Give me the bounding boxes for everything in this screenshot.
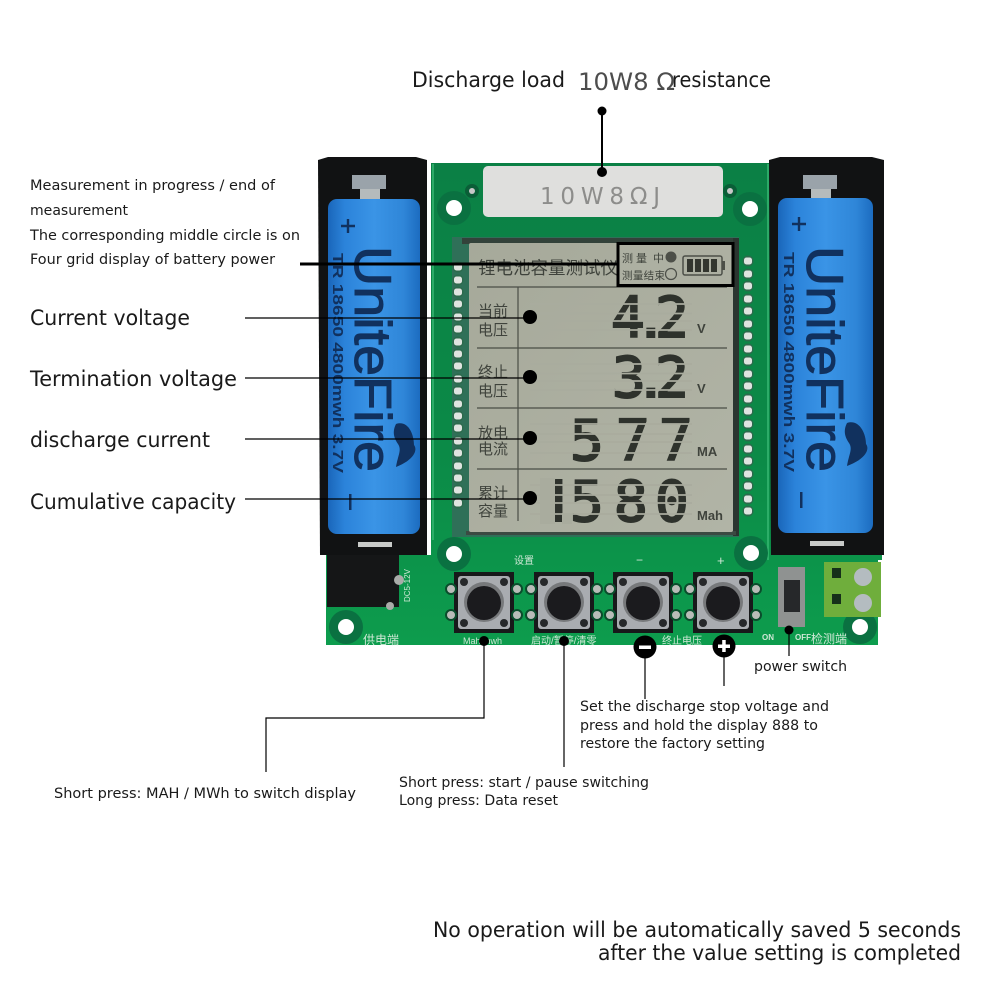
callout: plus button (712, 634, 736, 686)
footer note: after the value setting is completed (598, 941, 961, 965)
resistor: 10W8ΩJ (540, 184, 660, 210)
footer note: No operation will be automatically saved 5 seconds (433, 918, 961, 942)
status highlight box: 测 (622, 252, 633, 265)
label: current voltage: Current voltage (30, 306, 190, 330)
heading: discharge load (412, 68, 771, 96)
reading: 4.2 V: 4.2 (611, 286, 689, 351)
board silkscreen labels: − (636, 553, 643, 567)
board silkscreen labels: 终止电压 (662, 634, 702, 647)
right battery: TR 18650 4800mwh 3.7V (780, 252, 797, 472)
row labels: 电压 (478, 383, 508, 400)
board silkscreen labels: 检测端 (811, 631, 847, 646)
terminal block (824, 562, 881, 617)
heading: discharge load: 10W8 Ω (578, 68, 675, 96)
label: termination voltage (29, 367, 537, 391)
row labels: 放电 (478, 425, 508, 442)
board silkscreen labels: 设置 (514, 555, 534, 567)
DC power jack (327, 555, 404, 610)
board silkscreen labels: Mah/mwh (463, 636, 502, 646)
left battery (328, 199, 420, 534)
status highlight box: 量 (636, 252, 647, 265)
callout: power switch: power switch (754, 659, 847, 675)
text block: measurement status: measurement (30, 203, 128, 219)
LCD title: 锂电池容量测试仪 (478, 258, 618, 278)
reading: 1580 Mah: Mah (697, 508, 723, 523)
footer note (433, 918, 961, 965)
status highlight box: 中 (653, 252, 664, 265)
text block: measurement status: The corresponding middle circle is on (29, 228, 300, 244)
text block: measurement status: Measurement in progress / end of (30, 178, 276, 194)
callout: minus button: press and hold the display 888 to (580, 718, 818, 734)
solder pins (452, 256, 754, 516)
row labels: 当前 (478, 303, 508, 320)
left battery holder (318, 157, 427, 555)
callout: minus button: restore the factory setting (580, 736, 765, 752)
callout: start/pause button (399, 636, 649, 809)
board silkscreen labels: 启动/暂停/清零 (531, 634, 597, 647)
buttons (446, 572, 761, 633)
segment gaps in the digits (530, 304, 692, 514)
callout: MAH/MWh button (54, 636, 489, 802)
board silkscreen labels: 供电端 (363, 633, 399, 647)
text block: measurement status (29, 178, 300, 268)
reading: 577 MA: MA (697, 444, 718, 459)
resistor (465, 166, 737, 217)
LCD screen (469, 243, 733, 535)
left battery: UniteFire (343, 246, 401, 472)
row labels: 终止 (478, 364, 508, 381)
callout: start/pause button: Short press: start / pause switching (399, 775, 649, 791)
label: current voltage (30, 306, 537, 330)
label: cumulative capacity: Cumulative capacity (30, 490, 236, 514)
row labels: 电流 (478, 441, 508, 458)
label: discharge current (30, 428, 537, 452)
text block: measurement status: Four grid display of battery power (30, 252, 275, 268)
left battery: TR 18650 4800mwh 3.7V (329, 253, 346, 473)
board silkscreen labels: ON (762, 633, 774, 642)
reading: 1580 Mah: 1580 (540, 470, 689, 535)
callout: start/pause button: Long press: Data reset (399, 793, 558, 809)
callout: MAH/MWh button: Short press: MAH / MWh to switch display (54, 786, 356, 802)
reading: 577 MA: 577 (570, 409, 693, 474)
label: cumulative capacity (30, 490, 537, 514)
callout: minus button (580, 636, 829, 752)
heading: discharge load: resistance (672, 68, 771, 92)
board silkscreen labels: + (717, 553, 725, 568)
row labels: 累计 (478, 485, 508, 502)
callout line: resistor (597, 106, 607, 177)
row labels: 容量 (478, 503, 508, 520)
label: termination voltage: Termination voltage (29, 367, 237, 391)
callout: power switch (754, 626, 847, 675)
status highlight box: 测量结束 (622, 269, 666, 282)
label: discharge current: discharge current (30, 428, 210, 452)
board silkscreen labels: DC5-12V (403, 568, 412, 602)
board silkscreen labels (363, 553, 847, 647)
right battery: UniteFire (795, 246, 853, 472)
row labels (478, 303, 508, 520)
power slide switch (778, 567, 805, 627)
right battery (778, 198, 873, 533)
PCB (326, 163, 882, 645)
board silkscreen labels: OFF (795, 633, 811, 642)
status highlight box (300, 244, 733, 286)
LCD frame (452, 237, 739, 537)
reading: 3.2 V: V (697, 381, 706, 396)
row labels: 电压 (478, 322, 508, 339)
reading: 3.2 V: 3.2 (612, 346, 689, 411)
right battery holder (769, 157, 884, 555)
callout: minus button: Set the discharge stop voltage and (580, 699, 829, 715)
heading: discharge load: Discharge load (412, 68, 565, 92)
reading: 4.2 V: V (697, 321, 706, 336)
panel: circuit board photo (318, 157, 884, 647)
mounting holes (329, 191, 877, 644)
